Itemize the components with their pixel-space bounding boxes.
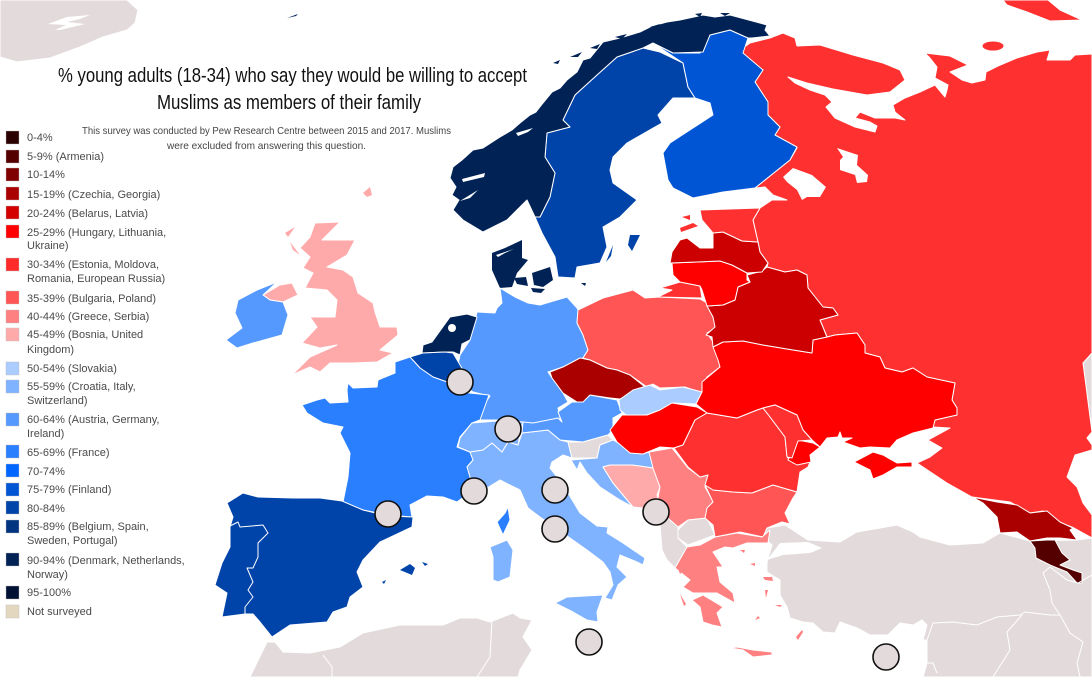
legend: Switzerland) [27, 395, 88, 407]
Lithuania [672, 261, 750, 306]
not surveyed: Kazakhstan [1053, 353, 1092, 432]
title: Muslims as members of their family [157, 92, 421, 114]
borders in Africa and the Middle East [323, 567, 1092, 677]
legend: Romania, European Russia) [27, 273, 165, 285]
Belarus [706, 267, 838, 353]
Slovakia [619, 385, 702, 418]
Spain and Portugal [215, 493, 428, 637]
legend: Norway) [27, 569, 68, 581]
Denmark [492, 240, 586, 293]
lake Onega [837, 148, 868, 183]
United Kingdom [263, 187, 398, 375]
legend: 65-69% (France) [27, 447, 110, 459]
Aegean islands [677, 550, 803, 640]
Russia [743, 0, 1092, 538]
Odessa region [788, 440, 820, 465]
legend: 70-74% [27, 466, 65, 478]
Peloponnese [692, 595, 723, 627]
Norwegian fjords [462, 173, 485, 182]
subtitle: were excluded from answering this question. [166, 140, 366, 152]
legend: 5-9% (Armenia) [27, 151, 104, 163]
Slovenia [568, 435, 613, 458]
Crimea [854, 452, 912, 479]
legend: 25-29% (Hungary, Lithuania, [27, 227, 166, 239]
Romania [674, 408, 810, 493]
subtitle [82, 125, 451, 152]
legend: 10-14% [27, 169, 65, 181]
Bosnia [603, 465, 660, 508]
not surveyed: Iceland [0, 0, 138, 62]
Gotland and Oland [606, 235, 640, 262]
legend [6, 131, 185, 618]
Northern Ireland [263, 283, 298, 302]
legend: 0-4% [27, 132, 53, 144]
Norway [450, 13, 770, 232]
legend: 45-49% (Bosnia, United [27, 329, 143, 341]
Jan Mayen [287, 14, 298, 18]
Latvia [670, 232, 768, 273]
title: % young adults (18-34) who say they would be willing to accept [58, 65, 527, 87]
legend: Kingdom) [27, 344, 74, 356]
Czechia [550, 358, 645, 402]
legend: 80-84% [27, 503, 65, 515]
Greece [675, 530, 803, 657]
Balearic islands [382, 562, 428, 584]
Sardinia [490, 540, 513, 582]
Georgia [972, 497, 1077, 541]
Sea of Marmara [767, 542, 822, 560]
Poland [577, 290, 720, 393]
North Macedonia [678, 518, 715, 545]
Norwegian islands [553, 13, 730, 64]
Germany [457, 288, 588, 424]
legend: 90-94% (Denmark, Netherlands, [27, 555, 185, 567]
legend: 40-44% (Greece, Serbia) [27, 311, 149, 323]
legend: 35-39% (Bulgaria, Poland) [27, 293, 156, 305]
Belgium [410, 352, 463, 382]
Italy [467, 430, 645, 622]
lake Ladoga [783, 168, 826, 200]
legend: Sweden, Portugal) [27, 535, 118, 547]
legend: 75-79% (Finland) [27, 484, 111, 496]
not surveyed: Turkey and the Middle East [763, 525, 1092, 677]
subtitle: This survey was conducted by Pew Research Centre between 2015 and 2017. Muslims [82, 125, 451, 137]
France [302, 357, 510, 535]
title [58, 65, 527, 114]
Croatia [571, 440, 653, 507]
legend: 95-100% [27, 587, 71, 599]
Kolguev island [982, 41, 1004, 51]
Novaya Zemlya [1003, 0, 1082, 21]
legend: 20-24% (Belarus, Latvia) [27, 208, 148, 220]
legend: 55-59% (Croatia, Italy, [27, 381, 136, 393]
Finland [653, 30, 797, 198]
Estonia [680, 208, 760, 242]
Armenia [1030, 540, 1082, 583]
legend: 60-64% (Austria, Germany, [27, 414, 159, 426]
markers: microstates and small territories [375, 369, 899, 670]
Kaliningrad [658, 282, 702, 298]
Sicily [555, 595, 603, 622]
Ukraine [696, 333, 957, 479]
legend: Ireland) [27, 428, 64, 440]
Scottish islands [285, 187, 372, 255]
not surveyed: North Africa [250, 613, 532, 677]
Switzerland [458, 421, 523, 452]
Hungary [610, 403, 707, 454]
legend: Not surveyed [27, 606, 92, 618]
Spain-Portugal border [230, 522, 268, 614]
Serbia [649, 448, 714, 527]
Austria [522, 395, 622, 442]
legend: Ukraine) [27, 240, 69, 252]
legend: 15-19% (Czechia, Georgia) [27, 189, 160, 201]
Crete [730, 647, 772, 657]
Ireland [226, 282, 288, 348]
Sweden [535, 48, 695, 278]
Moldova [763, 405, 812, 458]
Bulgaria [705, 485, 797, 537]
Corsica [497, 507, 510, 535]
Netherlands [422, 314, 477, 355]
Albania and Montenegro [655, 507, 687, 568]
legend: 85-89% (Belgium, Spain, [27, 521, 149, 533]
legend: 30-34% (Estonia, Moldova, [27, 259, 159, 271]
legend: 50-54% (Slovakia) [27, 363, 117, 375]
